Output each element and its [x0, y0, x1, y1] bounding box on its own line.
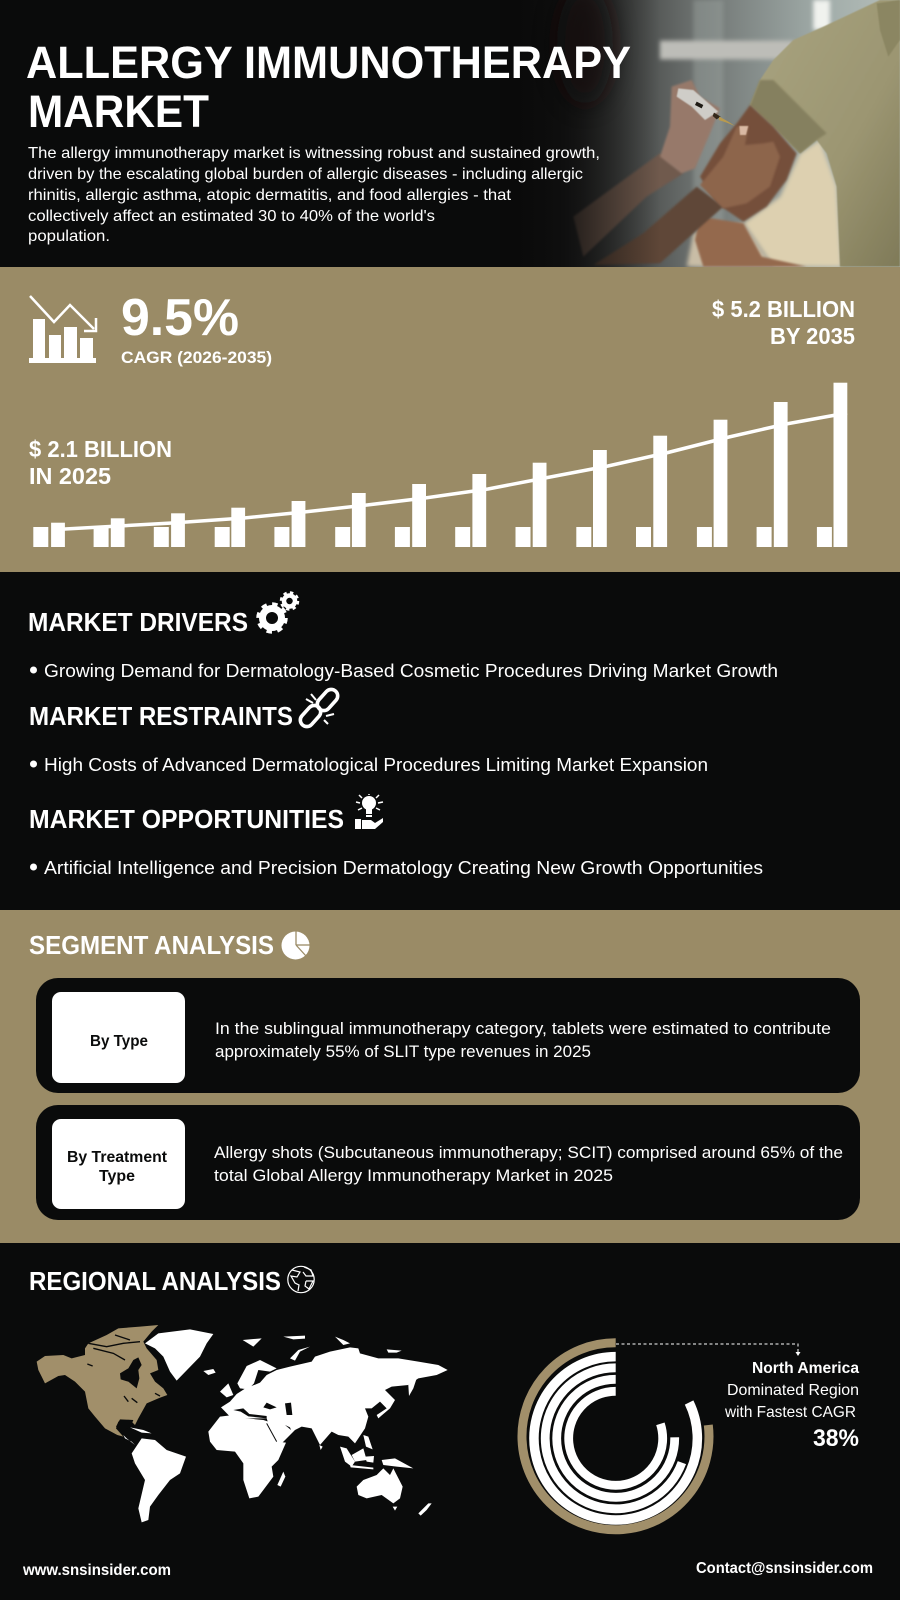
intro paragraph: rhinitis, allergic asthma, atopic dermatitis, and food allergies - that [28, 187, 512, 204]
inland seas [233, 1403, 292, 1442]
icon: growth chart [29, 296, 96, 363]
icon: idea in hand [355, 794, 383, 829]
2025 market size: IN 2025 [29, 463, 111, 489]
driver bullet: Growing Demand for Dermatology-Based Cosmetic Procedures Driving Market Growth [44, 661, 778, 681]
region: north america [37, 1325, 167, 1437]
title: ALLERGY IMMUNOTHERAPY [26, 37, 631, 88]
title [26, 37, 631, 137]
opportunity bullet: Artificial Intelligence and Precision Dermatology Creating New Growth Opportunities [44, 858, 763, 878]
dashed leader arrow [616, 1344, 800, 1356]
heading: segment analysis: SEGMENT ANALYSIS [29, 930, 274, 960]
footer: Contact@snsinsider.com [696, 1560, 873, 1577]
photo: injection in the upper arm [562, 0, 900, 267]
card: by treatment type: Type [99, 1168, 135, 1185]
panel: market size [0, 267, 900, 572]
regional callout: Dominated Region [727, 1382, 859, 1399]
panel: market dynamics [28, 592, 778, 878]
region: rest of world [123, 1329, 448, 1522]
regional callout [724, 1360, 859, 1452]
2035 market size: $ 5.2 BILLION [712, 296, 855, 322]
world map [37, 1325, 448, 1522]
2035 market size [712, 296, 855, 349]
card: by type: In the sublingual immunotherapy category, tablets were estimated to contribute [215, 1020, 831, 1038]
card: by treatment type: total Global Allergy Immunotherapy Market in 2025 [214, 1167, 613, 1185]
bar chart with growth curve [33, 383, 847, 547]
CAGR label: CAGR (2026-2035) [121, 348, 272, 367]
intro paragraph: The allergy immunotherapy market is witnessing robust and sustained growth, [28, 145, 600, 162]
icon: broken chain [298, 687, 340, 729]
card: by treatment type: Allergy shots (Subcutaneous immunotherapy; SCIT) comprised around 65% of the [214, 1144, 843, 1162]
footer: www.snsinsider.com [22, 1562, 171, 1579]
card: by type: By Type [90, 1033, 148, 1050]
title: MARKET [28, 86, 209, 137]
footer [22, 1560, 873, 1579]
2025 market size: $ 2.1 BILLION [29, 436, 172, 462]
restraint bullet: High Costs of Advanced Dermatological Procedures Limiting Market Expansion [44, 755, 708, 775]
card: by treatment type [36, 1105, 860, 1220]
heading: regional analysis: REGIONAL ANALYSIS [29, 1266, 281, 1296]
icon: pie chart [282, 931, 310, 960]
2025 market size [29, 436, 172, 489]
panel: regional analysis [29, 1266, 859, 1530]
ring chart [522, 1343, 709, 1530]
card: by treatment type: By Treatment [67, 1149, 167, 1166]
heading: market drivers: MARKET DRIVERS [28, 607, 248, 637]
intro paragraph: population. [28, 228, 110, 245]
regional callout: with Fastest CAGR [724, 1404, 856, 1421]
card: by type: approximately 55% of SLIT type revenues in 2025 [215, 1043, 591, 1061]
intro paragraph: collectively affect an estimated 30 to 40% of the world's [28, 208, 435, 225]
panel: header [26, 0, 900, 267]
card: by type [36, 978, 860, 1093]
intro paragraph [28, 145, 600, 245]
heading: market opportunities: MARKET OPPORTUNITIES [29, 804, 344, 834]
panel: segment analysis [0, 910, 900, 1243]
icon: globe [288, 1266, 314, 1293]
heading: market restraints: MARKET RESTRAINTS [29, 701, 293, 731]
icon: gears [258, 592, 298, 632]
2035 market size: BY 2035 [770, 323, 855, 349]
intro paragraph: driven by the escalating global burden of allergic diseases - including allergic [28, 166, 583, 183]
regional callout: North America [752, 1360, 859, 1377]
CAGR value: 9.5% [121, 289, 239, 347]
regional callout: 38% [813, 1425, 859, 1452]
